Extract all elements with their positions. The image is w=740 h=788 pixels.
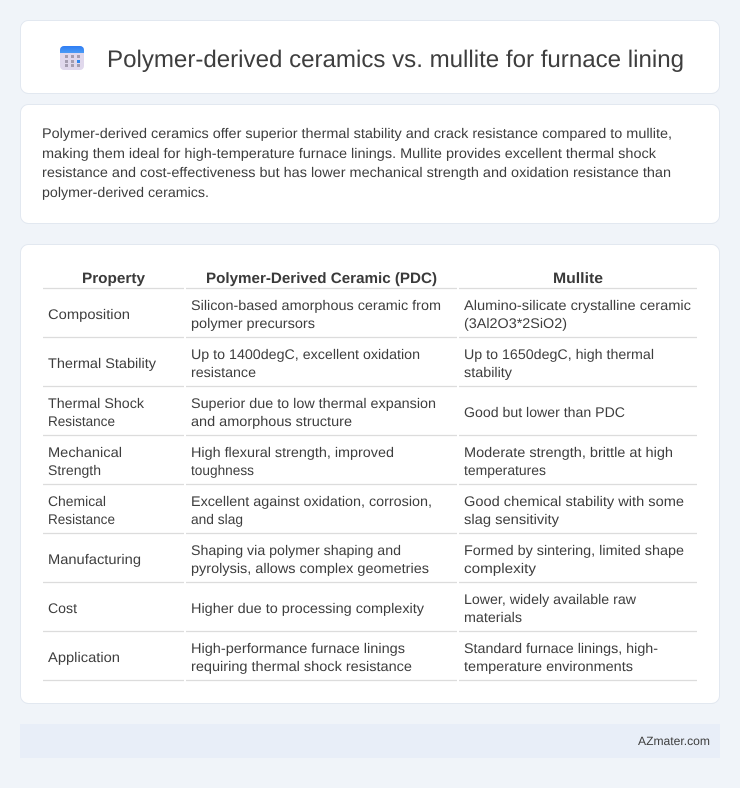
row: chemical resistance: Chemical	[48, 493, 106, 509]
row: composition: Composition	[48, 306, 130, 322]
table header: Mullite	[553, 270, 603, 287]
row: manufacturing: Manufacturing	[48, 551, 141, 567]
row: application: temperature environments	[464, 658, 633, 674]
row: application: requiring thermal shock resistance	[191, 658, 412, 674]
row: mechanical strength: Moderate strength, brittle at high	[464, 444, 673, 460]
row: mechanical strength: temperatures	[464, 462, 546, 478]
row: thermal shock resistance: Thermal Shock	[48, 395, 145, 411]
row: thermal stability: Up to 1650degC, high thermal	[464, 346, 654, 362]
row: mechanical strength	[43, 444, 697, 484]
row: chemical resistance: Resistance	[48, 511, 115, 527]
row: mechanical strength: Strength	[48, 462, 101, 478]
row: cost: Higher due to processing complexity	[191, 600, 424, 616]
row: cost: Cost	[48, 600, 77, 616]
text block: summary paragraph	[42, 125, 672, 200]
row: thermal stability: resistance	[191, 364, 256, 380]
row: manufacturing: complexity	[464, 560, 536, 576]
title: Polymer-derived ceramics vs. mullite for furnace lining	[107, 46, 684, 73]
row: cost: materials	[464, 609, 522, 625]
row: manufacturing: pyrolysis, allows complex geometries	[191, 560, 429, 576]
text block: summary paragraph: resistance and cost-effectiveness but has lower mechanical strength and oxidation resistance than	[42, 164, 671, 180]
row: thermal stability	[43, 346, 697, 386]
row: cost: Lower, widely available raw	[464, 591, 637, 607]
row: chemical resistance: Excellent against oxidation, corrosion,	[191, 493, 432, 509]
row: thermal shock resistance: and amorphous structure	[191, 413, 352, 429]
table header: Property	[82, 270, 146, 287]
row: mechanical strength: High flexural strength, improved	[191, 444, 394, 460]
text block: summary paragraph: Polymer-derived ceramics offer superior thermal stability and crack resistance compared to mullite,	[42, 125, 672, 141]
row: chemical resistance: slag sensitivity	[464, 511, 559, 527]
row: application: Standard furnace linings, high-	[464, 640, 658, 656]
table header	[43, 270, 697, 288]
row: cost	[43, 591, 697, 632]
panel: comparison table	[20, 244, 720, 704]
panel: introduction	[20, 104, 720, 224]
row: mechanical strength: toughness	[191, 462, 254, 478]
row: thermal shock resistance	[43, 395, 697, 436]
row: composition: polymer precursors	[191, 315, 315, 331]
row: manufacturing: Shaping via polymer shaping and	[191, 542, 401, 558]
row: chemical resistance: Good chemical stability with some	[464, 493, 684, 509]
footer: AZmater.com	[638, 734, 710, 748]
row: mechanical strength: Mechanical	[48, 444, 122, 460]
row: manufacturing	[43, 542, 697, 582]
table header: Polymer-Derived Ceramic (PDC)	[206, 270, 437, 287]
icon: calendar table	[60, 46, 84, 70]
row: application	[43, 640, 697, 680]
row: manufacturing: Formed by sintering, limited shape	[464, 542, 684, 558]
row: application: High-performance furnace linings	[191, 640, 405, 656]
text block: summary paragraph: polymer-derived ceramics.	[42, 184, 209, 200]
row: chemical resistance	[43, 493, 697, 534]
row: thermal shock resistance: Superior due to low thermal expansion	[191, 395, 436, 411]
row: composition: Alumino-silicate crystalline ceramic	[464, 297, 691, 313]
panel: title header	[20, 20, 720, 94]
footer	[20, 724, 720, 758]
row: thermal stability: stability	[464, 364, 512, 380]
text block: summary paragraph: making them ideal for high-temperature furnace linings. Mullite provides excellent thermal shock	[42, 145, 657, 161]
row: thermal shock resistance: Resistance	[48, 413, 115, 429]
row: composition: Silicon-based amorphous ceramic from	[191, 297, 441, 313]
row: chemical resistance: and slag	[191, 511, 243, 527]
row: thermal shock resistance: Good but lower than PDC	[464, 404, 625, 420]
row: composition	[43, 297, 697, 338]
row: thermal stability: Thermal Stability	[48, 355, 156, 371]
row: application: Application	[48, 649, 120, 665]
row: thermal stability: Up to 1400degC, excellent oxidation	[191, 346, 420, 362]
row: composition: (3Al2O3*2SiO2)	[464, 315, 567, 331]
